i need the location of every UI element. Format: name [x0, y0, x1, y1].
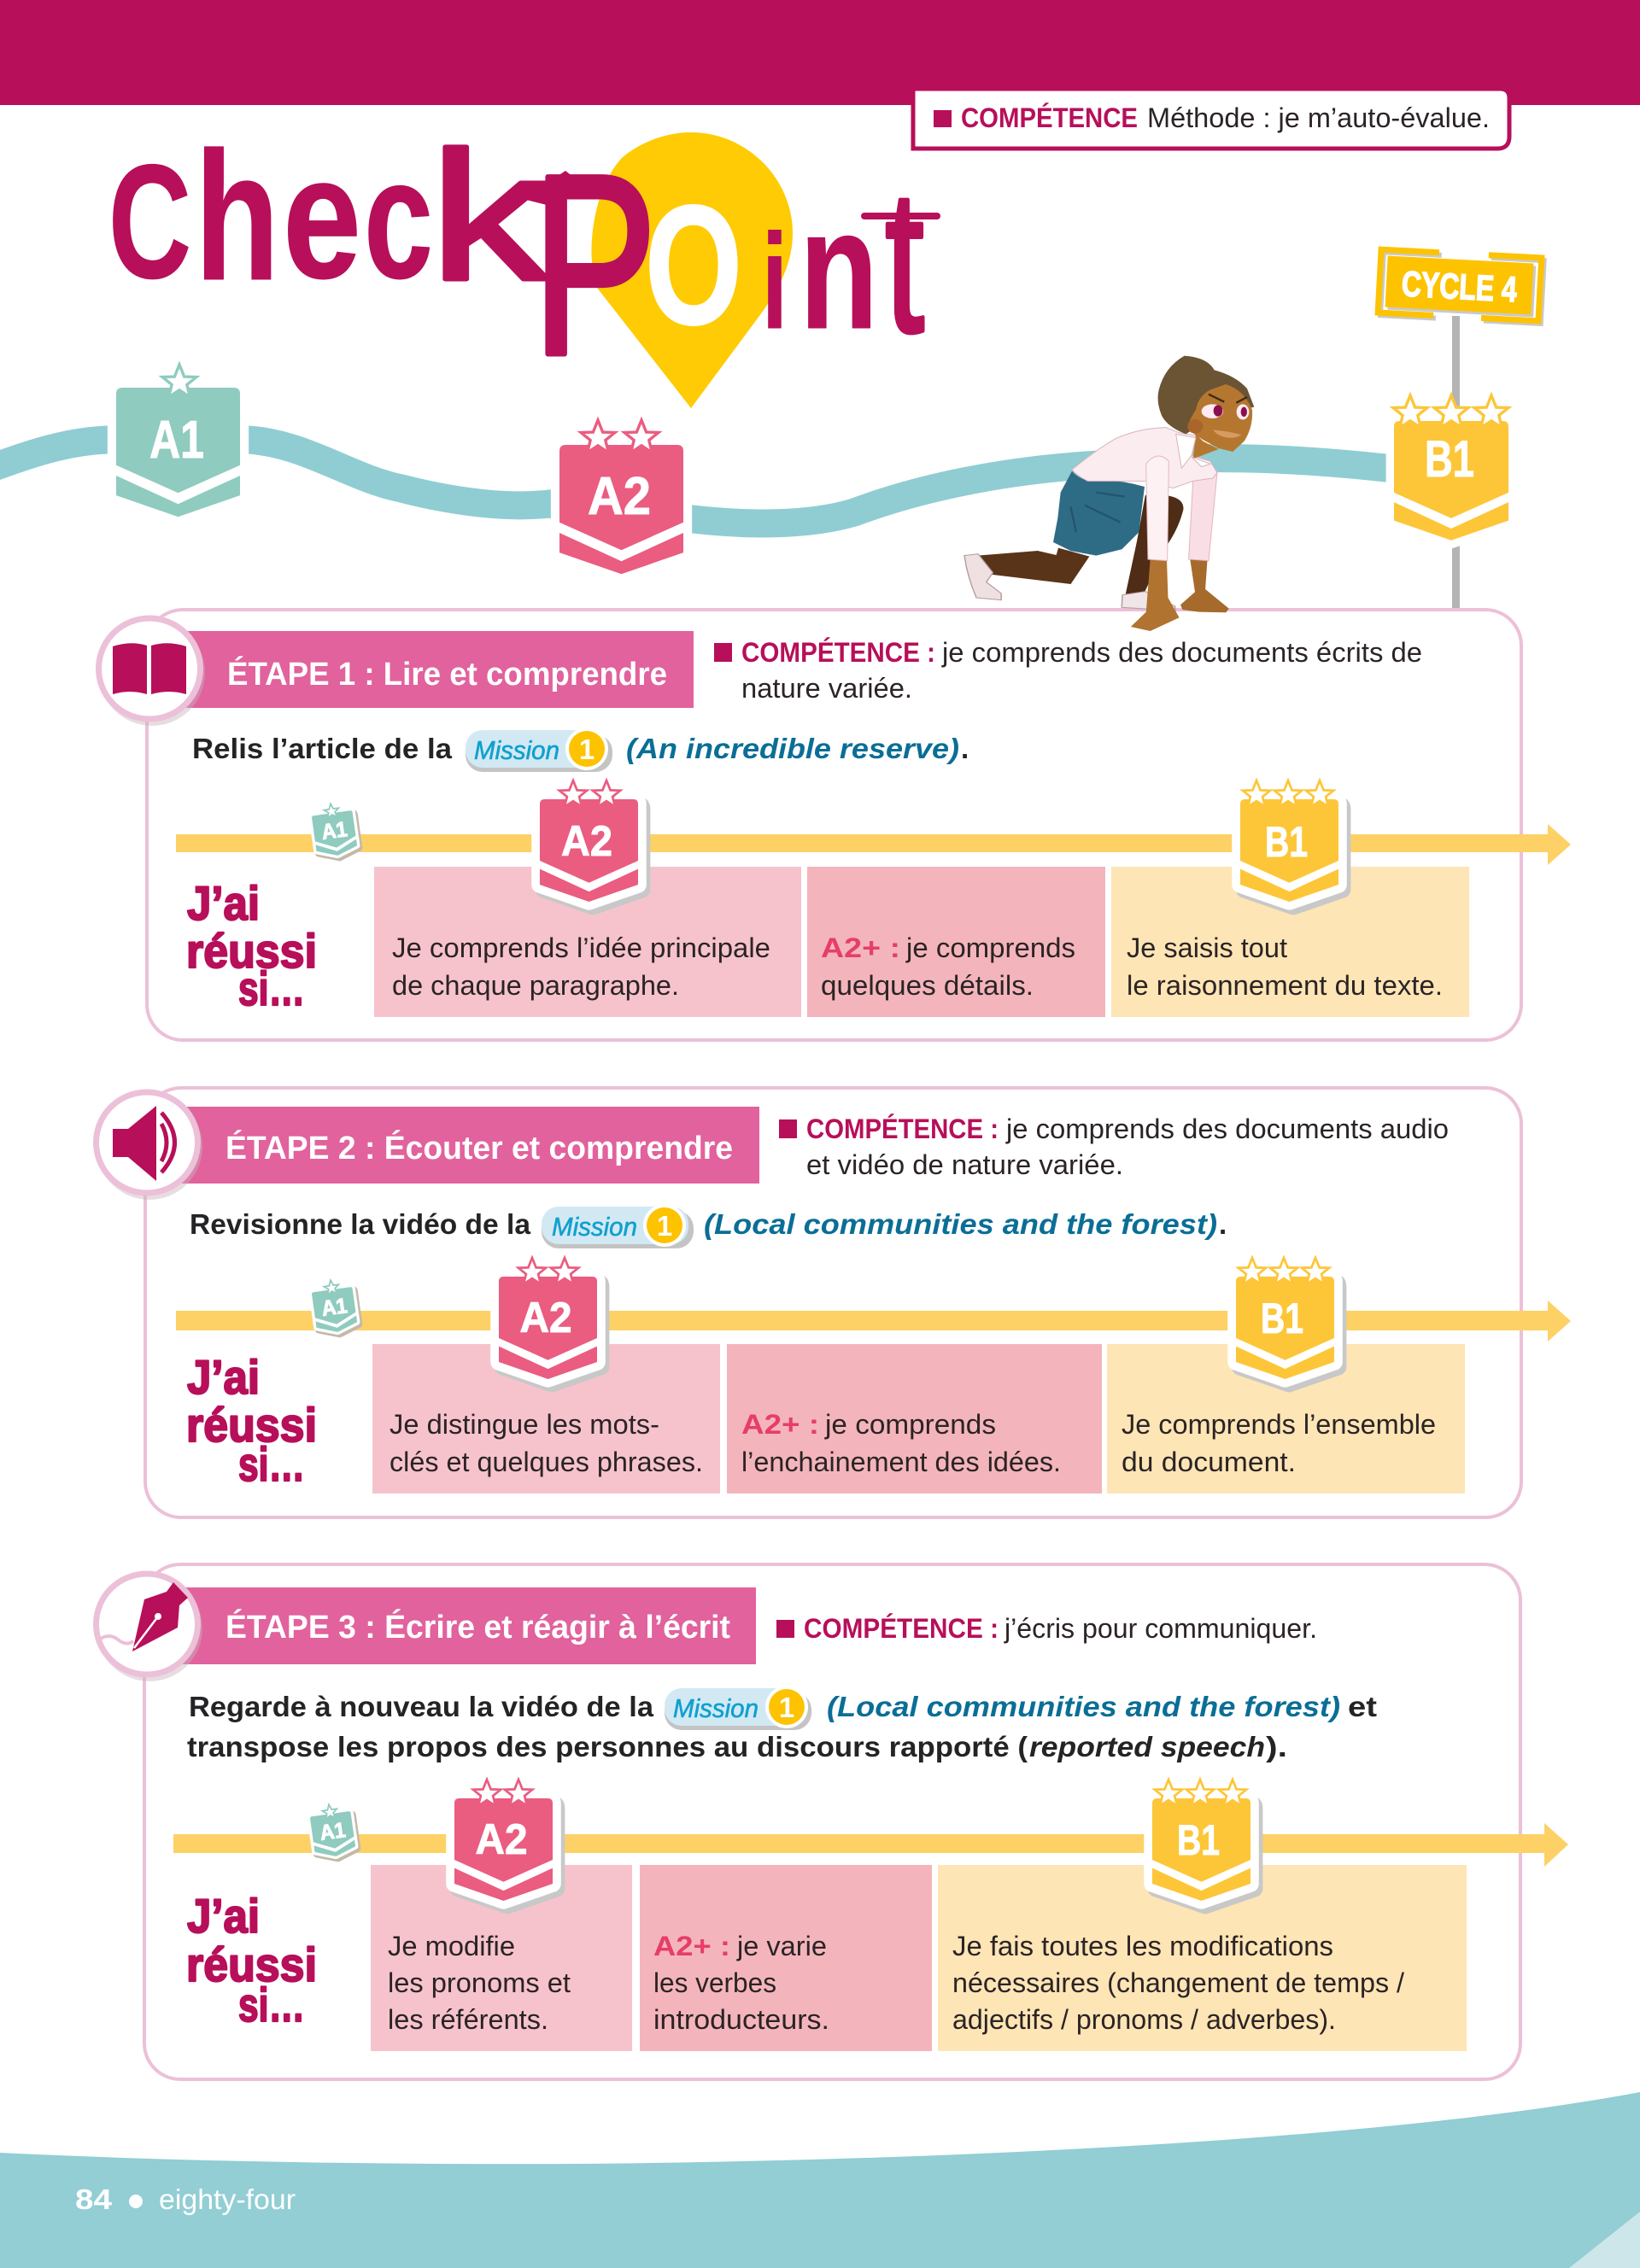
small badge: A2: A2	[475, 1815, 528, 1863]
small badge: A1: A1	[320, 1294, 348, 1321]
competence text: COMPÉTENCE :	[741, 637, 935, 668]
small badge: B1: B1	[1261, 1295, 1303, 1342]
mission tag	[665, 1686, 811, 1730]
small badge: B1: B1	[1177, 1816, 1220, 1864]
small badge: B1	[1236, 1258, 1338, 1384]
mission tag: Mission	[552, 1212, 637, 1242]
competence tag: method: Méthode : je m’auto-évalue.	[1147, 102, 1490, 133]
cell: A2+: quelques détails.	[821, 970, 1034, 1001]
badge: A1 level: A1	[149, 411, 204, 470]
label: j'ai réussi si	[186, 1889, 317, 2031]
title: Checkpoint: i	[762, 207, 788, 357]
small badge: A1	[310, 1277, 360, 1337]
small badge: A1: A1	[320, 817, 348, 845]
back leg	[978, 548, 1089, 584]
instruction: (Local communities and the forest)	[704, 1208, 1217, 1240]
label: j'ai réussi si: si…	[238, 1978, 305, 2031]
panel: étape 3	[96, 1564, 1568, 2079]
cell: A2+: A2+ :	[821, 932, 900, 963]
badge: A2 level	[559, 420, 683, 574]
heading band	[182, 1587, 756, 1664]
label: j'ai réussi si: J’ai	[187, 1350, 260, 1404]
small badge: A1: A1	[319, 1818, 347, 1845]
cell: A2+: introducteurs.	[653, 2004, 829, 2035]
page number: eighty-four	[159, 2183, 296, 2215]
instruction: (Local communities and the forest)	[827, 1691, 1340, 1722]
torso	[1072, 428, 1217, 488]
cell: A2+: les verbes	[653, 1967, 776, 1998]
cell: B1	[1111, 867, 1469, 1017]
competence text: j’écris pour communiquer.	[1004, 1613, 1317, 1644]
far hand	[1180, 558, 1229, 612]
competence text: et vidéo de nature variée.	[806, 1149, 1123, 1180]
small badge: A1	[308, 1802, 359, 1862]
instruction: .	[961, 733, 969, 764]
label: j'ai réussi si: si…	[238, 962, 305, 1015]
sign: cycle 4: CYCLE 4	[1401, 263, 1519, 309]
front leg	[1126, 495, 1183, 599]
timeline arrow	[173, 1823, 1568, 1867]
badge: A1 level	[116, 365, 240, 517]
panel: étape 2	[96, 1088, 1571, 1517]
instruction	[190, 1204, 1227, 1248]
eyes	[1202, 404, 1249, 419]
neck	[1193, 434, 1219, 459]
small badge: A1	[310, 801, 360, 861]
instruction: transpose les propos des personnes au discours rapporté (	[187, 1731, 1028, 1762]
icon: open book	[99, 618, 205, 726]
competence text: COMPÉTENCE :	[804, 1613, 999, 1644]
level path: wavy band	[0, 440, 1401, 523]
cell: A2: Je modifie	[388, 1931, 515, 1961]
footer band	[0, 2092, 1640, 2268]
small badge: A2	[454, 1780, 557, 1906]
mission tag: Mission	[474, 735, 559, 765]
title: Checkpoint: O	[645, 171, 742, 360]
badge: B1 level: B1	[1425, 430, 1474, 488]
label: j'ai réussi si: réussi	[186, 1938, 317, 1991]
small badge: B1	[1240, 780, 1343, 907]
badge: A2 level: A2	[588, 467, 651, 526]
cell: A2: les référents.	[388, 2004, 548, 2035]
small badge: B1: B1	[1265, 818, 1308, 866]
competence tag: method	[913, 89, 1509, 149]
competence text: je comprends des documents audio	[1005, 1114, 1449, 1144]
instruction: Relis l’article de la	[192, 733, 453, 764]
signpost pole	[1452, 316, 1460, 609]
heading band: ÉTAPE 3 : Écrire et réagir à l’écrit	[226, 1608, 730, 1645]
small badge: A2	[540, 780, 642, 907]
cell: B1: du document.	[1122, 1447, 1296, 1477]
heading band: ÉTAPE 2 : Écouter et comprendre	[226, 1129, 733, 1166]
upper body	[1053, 356, 1254, 561]
instruction	[192, 728, 969, 772]
cell: B1	[938, 1865, 1467, 2051]
icon: speaker	[96, 1092, 202, 1200]
cell: A2+	[807, 867, 1105, 1017]
cell: A2+	[640, 1865, 932, 2051]
cell: A2: Je comprends l’idée principale	[392, 932, 770, 963]
skirt	[1053, 471, 1145, 556]
cell: A2+	[727, 1344, 1102, 1493]
mission tag: Mission	[673, 1693, 758, 1723]
competence text	[776, 1613, 1317, 1644]
cell: A2: les pronoms et	[388, 1967, 571, 1998]
top banner	[0, 0, 1640, 105]
title: Checkpoint: n	[800, 174, 878, 365]
competence tag: method: COMPÉTENCE	[961, 102, 1138, 133]
page number: 84	[75, 2183, 113, 2215]
cell: A2: Je distingue les mots-	[390, 1409, 659, 1440]
cell: A2+: je comprends	[905, 932, 1075, 963]
label: j'ai réussi si: J’ai	[187, 876, 260, 930]
instruction: (An incredible reserve)	[626, 733, 959, 764]
competence text	[779, 1114, 1449, 1180]
label: j'ai réussi si	[186, 876, 317, 1015]
instruction: et	[1348, 1691, 1377, 1722]
rear shoe	[964, 554, 1001, 600]
cell: A2	[374, 867, 801, 1017]
lower body	[964, 495, 1229, 631]
icon: fountain pen	[96, 1574, 202, 1681]
badge: B1 level	[1393, 395, 1508, 541]
small badge: B1	[1152, 1780, 1255, 1906]
cell: B1: Je fais toutes les modifications	[952, 1931, 1333, 1961]
mission tag: 1	[779, 1692, 794, 1723]
title: Checkpoint: t	[885, 149, 924, 375]
cell: A2: clés et quelques phrases.	[390, 1447, 703, 1477]
label: j'ai réussi si: réussi	[186, 1398, 317, 1452]
instruction	[187, 1686, 1377, 1762]
small badge: A2: A2	[519, 1294, 572, 1342]
label: j'ai réussi si: si…	[238, 1437, 305, 1491]
cell: A2+: A2+ :	[741, 1409, 819, 1440]
sign: cycle 4	[1378, 249, 1544, 324]
title: Checkpoint	[108, 114, 940, 408]
cell: B1: Je saisis tout	[1127, 932, 1287, 963]
cell: B1: Je comprends l’ensemble	[1122, 1409, 1436, 1440]
collar	[1176, 434, 1210, 468]
title: Checkpoint: C	[108, 132, 191, 313]
heading band	[184, 631, 694, 708]
title: Checkpoint: k	[430, 114, 548, 319]
label: j'ai réussi si: réussi	[186, 924, 317, 978]
cell: B1: adjectifs / pronoms / adverbes).	[952, 2004, 1336, 2035]
instruction: Regarde à nouveau la vidéo de la	[189, 1691, 654, 1722]
near sleeve	[1146, 456, 1168, 561]
title: Checkpoint: P	[532, 121, 657, 408]
cell: A2+: A2+ :	[653, 1931, 730, 1961]
cell: B1	[1107, 1344, 1465, 1493]
mission tag	[466, 728, 612, 772]
panel: étape 1	[99, 610, 1571, 1040]
competence text: COMPÉTENCE :	[806, 1114, 999, 1144]
title: Checkpoint: h	[195, 114, 279, 319]
heading band: ÉTAPE 1 : Lire et comprendre	[227, 655, 667, 693]
cell: A2: de chaque paragraphe.	[392, 970, 679, 1001]
mission tag: 1	[579, 734, 594, 765]
front shoe	[1122, 592, 1175, 611]
label: j'ai réussi si: J’ai	[187, 1889, 260, 1943]
instruction: .	[1219, 1208, 1227, 1240]
competence text: nature variée.	[741, 673, 912, 704]
illustration: girl at the starting blocks	[964, 356, 1254, 631]
timeline arrow	[176, 824, 1571, 865]
cell: B1: le raisonnement du texte.	[1127, 970, 1443, 1001]
instruction: ).	[1266, 1731, 1287, 1762]
title: Checkpoint: c	[364, 124, 433, 314]
cell: A2+: je comprends	[824, 1409, 996, 1440]
near hand	[1131, 559, 1180, 631]
icon: map pin	[591, 132, 793, 408]
cell: A2+: l’enchainement des idées.	[741, 1447, 1061, 1477]
page number	[75, 2183, 296, 2215]
cell: A2	[372, 1344, 720, 1493]
mission tag	[542, 1204, 694, 1248]
mission tag: 1	[657, 1210, 672, 1242]
cell: B1: nécessaires (changement de temps /	[952, 1967, 1404, 1998]
cell: A2+: je varie	[736, 1931, 827, 1961]
small badge: A2	[499, 1258, 601, 1384]
title: Checkpoint: e	[283, 120, 361, 315]
ear	[1187, 419, 1203, 434]
far sleeve	[1189, 472, 1217, 561]
face	[1187, 384, 1252, 452]
instruction: Revisionne la vidéo de la	[190, 1208, 531, 1240]
small badge: A2: A2	[561, 817, 612, 865]
instruction: reported speech	[1029, 1731, 1265, 1762]
competence text	[714, 637, 1422, 704]
competence text: je comprends des documents écrits de	[941, 637, 1422, 668]
cell: A2	[371, 1865, 632, 2051]
heading band	[182, 1107, 759, 1184]
timeline arrow	[176, 1301, 1571, 1342]
label: j'ai réussi si	[186, 1350, 317, 1491]
hair	[1158, 356, 1254, 434]
